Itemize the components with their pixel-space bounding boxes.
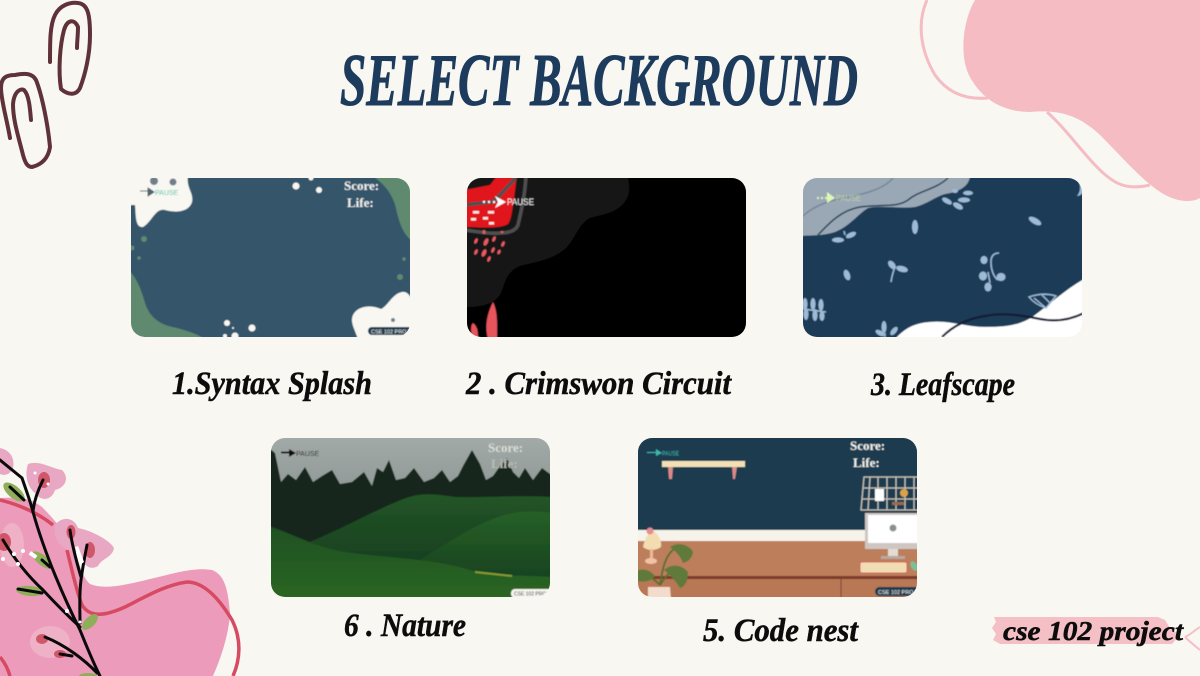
pause label	[483, 196, 506, 208]
card 1: Syntax Splash thumbnail: Life:	[347, 195, 374, 210]
white splash top left	[129, 176, 192, 227]
lamp and plant	[636, 528, 693, 599]
shelf	[662, 461, 745, 479]
card 5: Code nest thumbnail: PAUSE	[662, 450, 680, 458]
decoration: bottom left blossom branch	[0, 448, 239, 676]
green leaves	[0, 479, 101, 676]
footer tag: cse 102 project: cse 102 project	[1003, 616, 1185, 646]
memo grid	[861, 477, 919, 510]
card 5: Code nest thumbnail	[636, 436, 928, 599]
card 4: Nature thumbnail: Life:	[491, 456, 518, 471]
card 5: Code nest thumbnail: CSE 102 PROJECT	[878, 590, 928, 596]
pause label	[281, 449, 296, 457]
white splash bottom right	[352, 292, 412, 339]
decoration: paperclips	[1, 3, 90, 167]
card 2: Crimson Circuit thumbnail	[465, 176, 748, 339]
footer tag: cse 102 project	[992, 616, 1200, 650]
pink blob	[0, 498, 230, 676]
decoration: top right pink blob	[921, 0, 1200, 201]
red outline	[0, 500, 239, 676]
card 4: Nature thumbnail: PAUSE	[296, 451, 320, 458]
label: Code nest: 5. Code nest	[703, 613, 859, 649]
computer	[860, 513, 920, 573]
title: SELECT BACKGROUND	[340, 40, 858, 122]
pause label	[647, 449, 662, 456]
card 4: Nature thumbnail: CSE 102 PROJ	[514, 592, 549, 598]
back hills	[310, 494, 550, 560]
project tag	[368, 327, 412, 335]
project tag	[875, 587, 921, 596]
label: Syntax Splash: 1.Syntax Splash	[172, 366, 372, 402]
card 1: Syntax Splash thumbnail: PAUSE	[155, 190, 179, 197]
label: Nature: 6 . Nature	[344, 608, 466, 644]
white wave bottom right	[895, 279, 1084, 339]
front hill	[269, 526, 552, 599]
forest silhouette	[271, 449, 550, 496]
label: Crimswon Circuit: 2 . Crimswon Circuit	[465, 366, 732, 402]
card 3: Leafscape thumbnail: PAUSE	[836, 194, 861, 203]
white highlights	[1, 472, 84, 624]
card 1: Syntax Splash thumbnail	[129, 176, 421, 340]
card 3: Leafscape thumbnail	[801, 176, 1084, 339]
leaf sprigs	[802, 189, 1056, 338]
score and life labels: Score:	[488, 440, 523, 455]
card 5: Code nest thumbnail: Life:	[853, 455, 880, 470]
flower centres	[0, 472, 95, 658]
score and life labels: Score:	[850, 438, 885, 453]
card 4: Nature thumbnail	[269, 436, 553, 599]
project tag	[511, 589, 553, 598]
card 1: Syntax Splash thumbnail: CSE 102 PROJECT	[371, 330, 421, 336]
score and life labels: Score:	[344, 178, 379, 193]
label: Leafscape: 3. Leafscape	[870, 367, 1015, 403]
pause label	[817, 192, 835, 203]
card 2: Crimson Circuit thumbnail: PAUSE	[507, 197, 534, 207]
branches	[0, 460, 100, 676]
pause label	[140, 188, 154, 196]
flowers	[0, 448, 114, 658]
